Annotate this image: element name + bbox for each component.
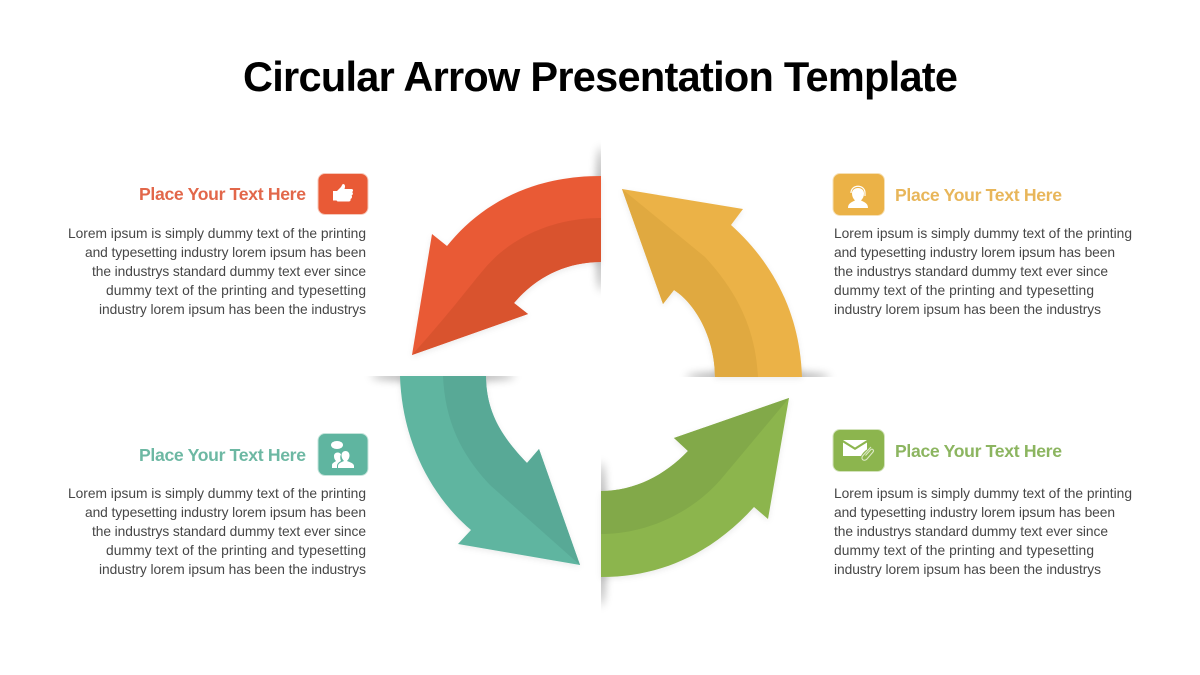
text block: bottom right: and typesetting industry lorem ipsum has been [834, 505, 1115, 520]
text block: top right: dummy text of the printing and typesetting [834, 283, 1094, 298]
icon: thumbs up [318, 174, 368, 214]
heading: bottom right: Place Your Text Here [895, 441, 1062, 461]
text block: bottom right [834, 486, 1132, 577]
text block: top right: Lorem ipsum is simply dummy text of the printing [834, 226, 1132, 241]
text block: bottom right: Lorem ipsum is simply dummy text of the printing [834, 486, 1132, 501]
text block: top left: Lorem ipsum is simply dummy text of the printing [68, 226, 366, 241]
text block: bottom left: and typesetting industry lorem ipsum has been [85, 505, 366, 520]
text block: top right: the industrys standard dummy text ever since [834, 264, 1108, 279]
arrow: red [412, 176, 601, 355]
panel: bottom right [833, 430, 1132, 577]
circular arrow diagram [371, 147, 830, 606]
text block: bottom right: industry lorem ipsum has been the industrys [834, 562, 1101, 577]
text block: top right: and typesetting industry lorem ipsum has been [834, 245, 1115, 260]
text block: bottom right: the industrys standard dummy text ever since [834, 524, 1108, 539]
heading: top left: Place Your Text Here [139, 184, 306, 204]
text block: top right [834, 226, 1132, 317]
icon: people with speech bubble [318, 434, 368, 476]
icon: envelope with paperclip [833, 430, 884, 472]
text block: top left: the industrys standard dummy text ever since [92, 264, 366, 279]
panel: top left [68, 174, 368, 317]
text block: top right: industry lorem ipsum has been the industrys [834, 302, 1101, 317]
text block: top left: and typesetting industry lorem ipsum has been [85, 245, 366, 260]
icon: headset person [833, 174, 884, 216]
text block: bottom left: the industrys standard dummy text ever since [92, 524, 366, 539]
text block: top left [68, 226, 366, 317]
text block: top left: dummy text of the printing and typesetting [106, 283, 366, 298]
text block: bottom left: industry lorem ipsum has been the industrys [99, 562, 366, 577]
arrow: yellow [622, 189, 802, 377]
fold shadows [371, 147, 830, 606]
arrow: teal [400, 376, 580, 565]
text block: bottom left: dummy text of the printing and typesetting [106, 543, 366, 558]
text block: bottom left [68, 486, 366, 577]
heading: top right: Place Your Text Here [895, 185, 1062, 205]
text block: top left: industry lorem ipsum has been the industrys [99, 302, 366, 317]
heading: bottom left: Place Your Text Here [139, 445, 306, 465]
arrow: green [601, 398, 789, 577]
panel: bottom left [68, 434, 368, 577]
text block: bottom right: dummy text of the printing and typesetting [834, 543, 1094, 558]
title: Circular Arrow Presentation Template [243, 53, 958, 100]
text block: bottom left: Lorem ipsum is simply dummy text of the printing [68, 486, 366, 501]
panel: top right [833, 174, 1132, 317]
